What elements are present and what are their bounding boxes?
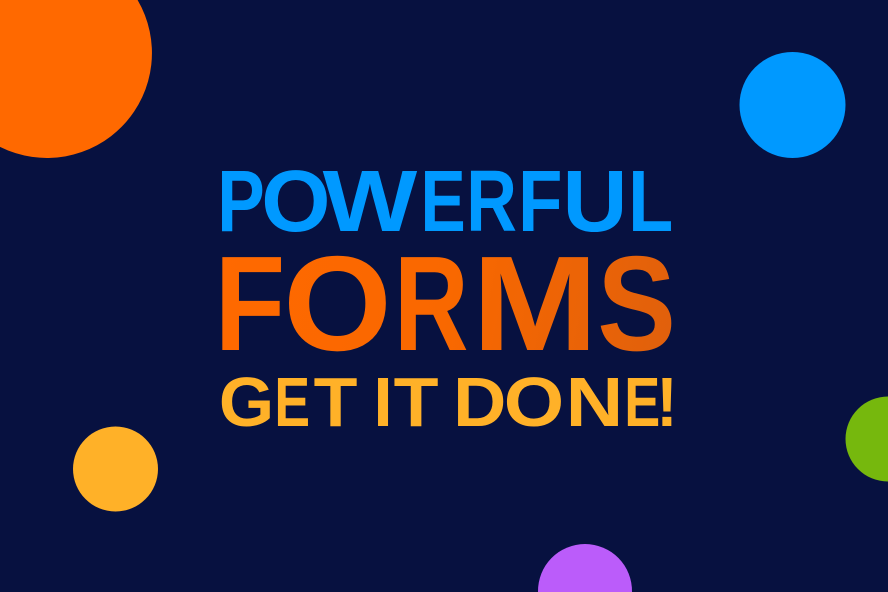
heading: POWERFUL: U xyxy=(562,153,628,250)
heading: POWERFUL: E xyxy=(420,153,466,250)
heading: GET IT DONE!: N xyxy=(566,363,623,441)
heading: POWERFUL: W xyxy=(323,153,418,250)
heading: FORMS: O xyxy=(283,228,392,379)
heading: GET IT DONE!: E xyxy=(624,363,660,441)
heading: POWERFUL: F xyxy=(518,153,562,250)
heading: GET IT DONE!: I xyxy=(373,363,393,441)
heading: GET IT DONE!: G xyxy=(219,363,274,441)
heading: POWERFUL: O xyxy=(261,153,331,250)
heading: GET IT DONE!: E xyxy=(274,363,310,441)
heading: POWERFUL: L xyxy=(628,153,673,250)
heading: POWERFUL: R xyxy=(466,153,517,250)
heading: FORMS: S xyxy=(597,228,676,379)
heading: GET IT DONE!: D xyxy=(453,363,506,441)
circle: blue top right xyxy=(740,52,846,158)
heading: FORMS: F xyxy=(215,228,285,379)
heading: FORMS: M xyxy=(472,228,598,379)
heading: GET IT DONE!: T xyxy=(314,363,357,441)
circle: orange top left xyxy=(0,0,152,158)
circle: purple bottom edge xyxy=(538,544,632,592)
heading: FORMS: R xyxy=(394,228,468,379)
heading: GET IT DONE!: O xyxy=(504,363,564,441)
heading: POWERFUL: P xyxy=(217,153,265,250)
heading: GET IT DONE!: ! xyxy=(656,363,678,441)
circle: green right edge xyxy=(846,396,888,482)
heading: GET IT DONE!: T xyxy=(394,363,438,441)
circle: yellow bottom left xyxy=(73,426,158,512)
